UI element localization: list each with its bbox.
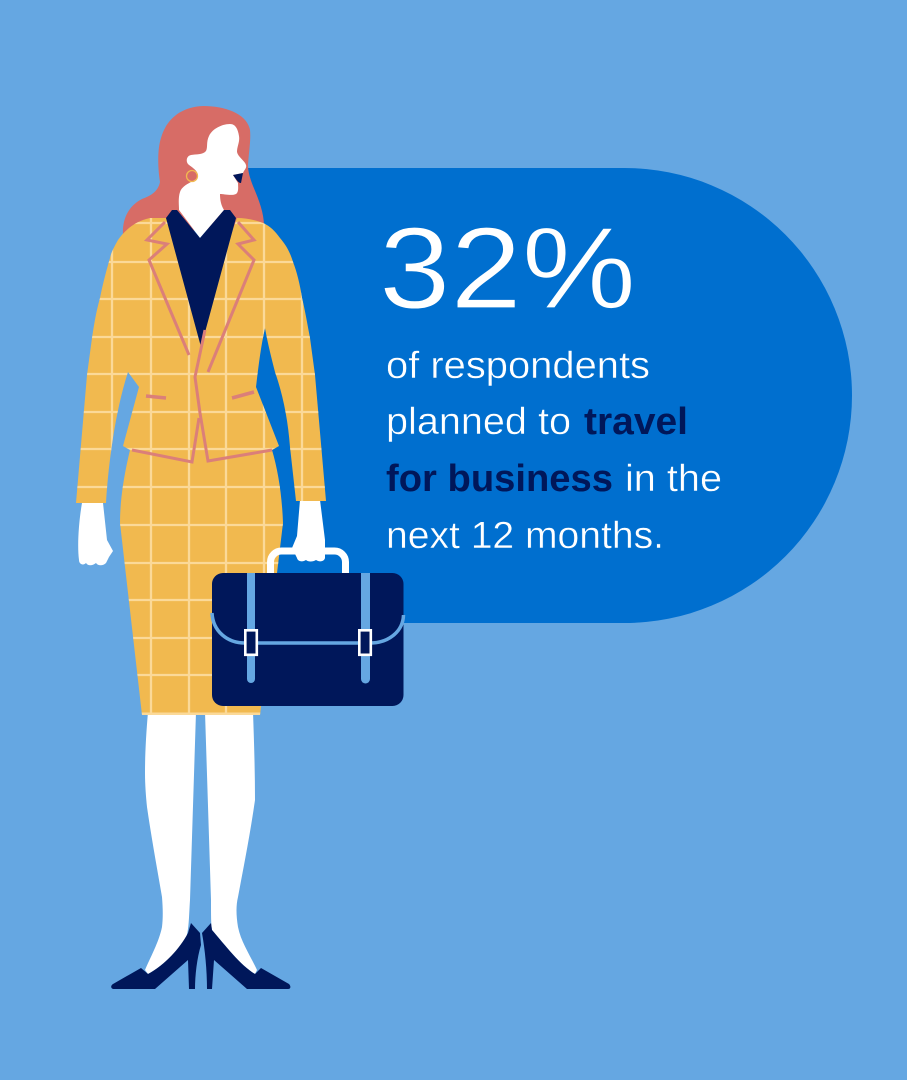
description text: travel xyxy=(584,401,688,443)
description text: planned to xyxy=(386,401,571,443)
flap xyxy=(212,613,404,643)
description text xyxy=(386,345,722,557)
panel: blue pill xyxy=(240,168,852,623)
shoes xyxy=(111,923,290,989)
right hand xyxy=(292,500,325,562)
description text: in the xyxy=(625,458,722,500)
briefcase xyxy=(212,551,404,706)
hair xyxy=(123,106,264,235)
handle xyxy=(270,551,346,576)
lips xyxy=(233,173,243,183)
buckles xyxy=(245,630,371,655)
lapels and seams xyxy=(132,222,272,462)
case body xyxy=(212,573,404,706)
description text: for business xyxy=(386,458,613,500)
earring xyxy=(186,170,198,182)
suit xyxy=(70,210,330,720)
statistic: 32% xyxy=(379,203,636,333)
jacket lining xyxy=(166,210,236,347)
straps xyxy=(247,573,370,684)
face and neck xyxy=(179,124,246,238)
legs xyxy=(145,712,257,974)
description text: next 12 months. xyxy=(386,515,664,557)
left hand xyxy=(78,503,113,565)
description text: of respondents xyxy=(386,345,650,387)
illustration: businesswoman with briefcase xyxy=(70,106,404,989)
